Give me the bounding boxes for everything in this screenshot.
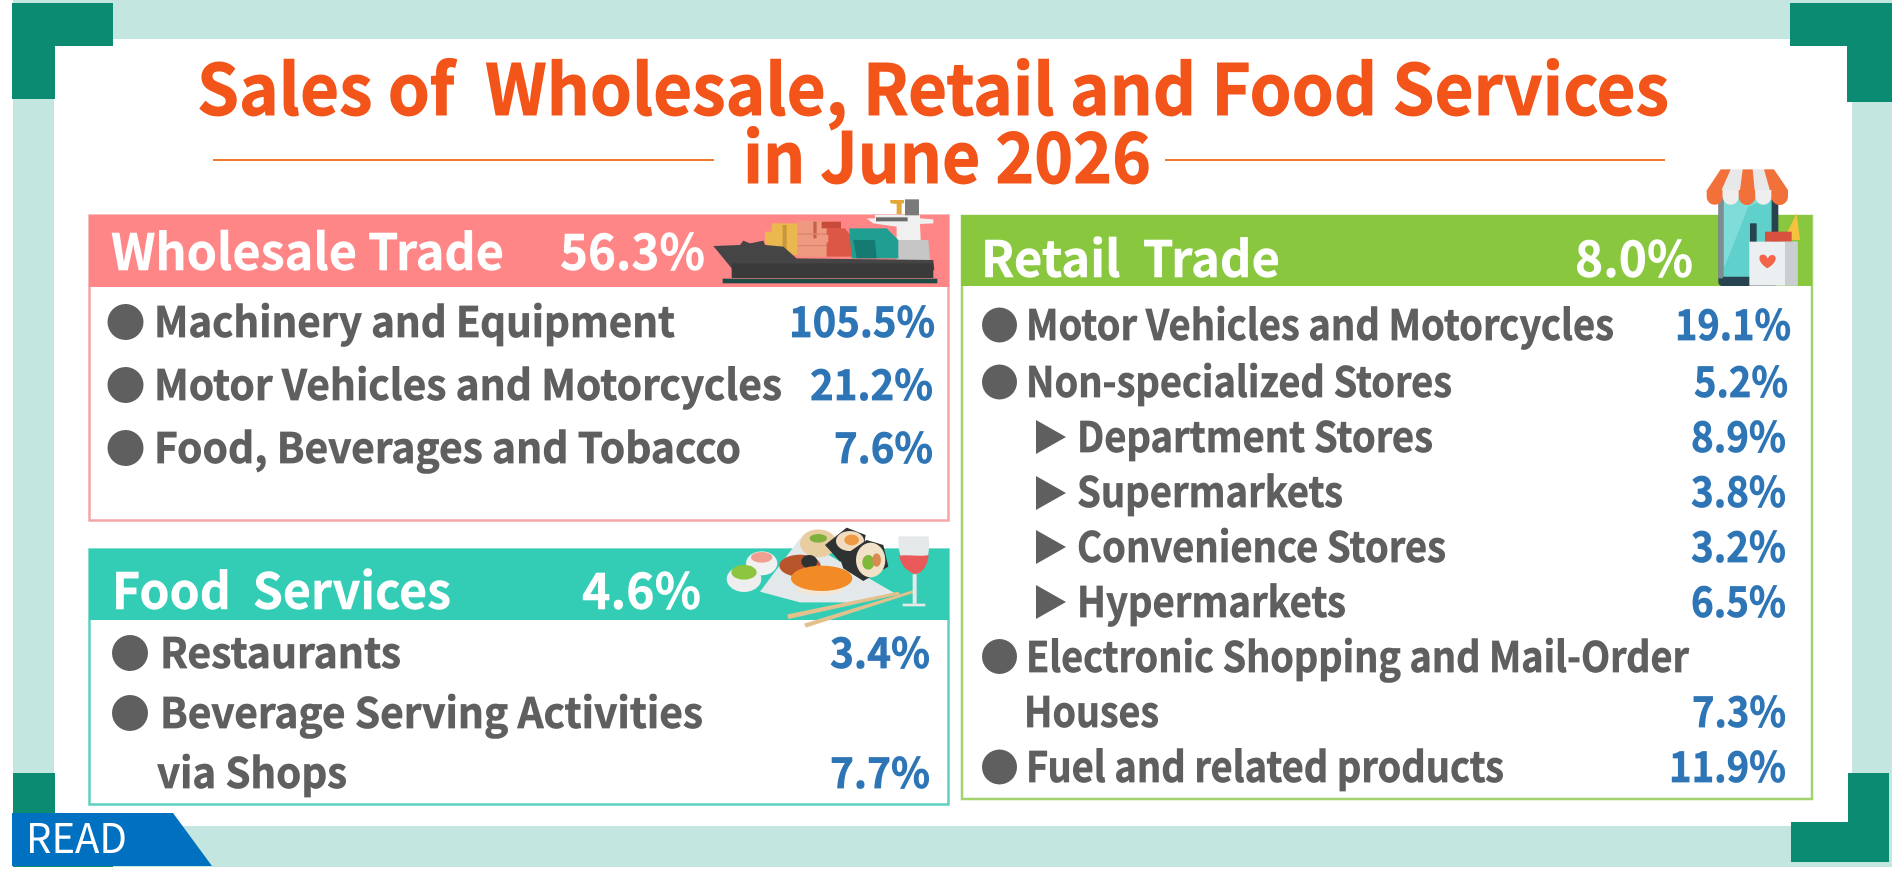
row: motor vehicles and motorcycles: Motor Vehicles and Motorcycles bbox=[154, 352, 782, 413]
panel: wholesale trade: 56.3% bbox=[560, 213, 705, 285]
row: convenience stores: Convenience Stores bbox=[1077, 514, 1446, 575]
row: motor vehicles and motorcycles: 21.2% bbox=[810, 352, 933, 413]
icon: container ship bbox=[713, 199, 937, 283]
panel: food services bbox=[89, 528, 949, 804]
row: electronic shopping and mail-order houses: Houses bbox=[1024, 679, 1159, 740]
row: convenience stores: 3.2% bbox=[1691, 514, 1786, 575]
row: electronic shopping and mail-order houses: Electronic Shopping and Mail-Order bbox=[1026, 624, 1690, 685]
row: restaurants: Restaurants bbox=[160, 620, 401, 681]
row: fuel and related products bbox=[982, 734, 1786, 795]
title: in June 2026 bbox=[743, 103, 1151, 204]
corner: bottom left bbox=[13, 773, 113, 867]
icon: sushi plate and wine bbox=[727, 528, 929, 628]
panel: wholesale trade: Wholesale Trade bbox=[111, 213, 504, 285]
row: department stores: 8.9% bbox=[1691, 404, 1786, 465]
row: supermarkets: Supermarkets bbox=[1077, 459, 1343, 520]
row: fuel and related products: 11.9% bbox=[1669, 734, 1786, 795]
title bbox=[197, 35, 1669, 204]
row: restaurants bbox=[112, 620, 930, 681]
read tag bbox=[12, 805, 212, 866]
corner: top right bbox=[1790, 3, 1892, 102]
panel: food services: 4.6% bbox=[582, 552, 701, 624]
row: non-specialized stores: 5.2% bbox=[1694, 349, 1788, 410]
row: beverage serving activities via shops bbox=[112, 680, 930, 801]
panel: retail trade: Retail Trade bbox=[981, 220, 1280, 292]
row: fuel and related products: Fuel and related products bbox=[1026, 734, 1504, 795]
row: restaurants: 3.4% bbox=[830, 620, 930, 681]
panel: wholesale trade bbox=[89, 199, 949, 520]
icon: phone shop with shopping bag bbox=[1707, 169, 1800, 286]
row: motor vehicles and motorcycles: Motor Vehicles and Motorcycles bbox=[1026, 292, 1614, 353]
row: supermarkets: 3.8% bbox=[1691, 459, 1786, 520]
row: convenience stores bbox=[1036, 514, 1786, 575]
row: food, beverages and tobacco: Food, Beverages and Tobacco bbox=[154, 415, 741, 476]
row: department stores: Department Stores bbox=[1077, 404, 1433, 465]
corner: top left bbox=[12, 3, 113, 99]
row: machinery and equipment: Machinery and Equipment bbox=[154, 289, 675, 350]
panel: food services: Food Services bbox=[112, 552, 451, 624]
row: food, beverages and tobacco: 7.6% bbox=[834, 415, 933, 476]
row: non-specialized stores bbox=[982, 349, 1788, 410]
corner: bottom right bbox=[1791, 773, 1889, 862]
row: electronic shopping and mail-order houses: 7.3% bbox=[1692, 679, 1786, 740]
row: machinery and equipment bbox=[108, 289, 935, 350]
row: hypermarkets: 6.5% bbox=[1691, 569, 1786, 630]
row: supermarkets bbox=[1036, 459, 1786, 520]
row: machinery and equipment: 105.5% bbox=[789, 289, 935, 350]
row: motor vehicles and motorcycles: 19.1% bbox=[1675, 292, 1791, 353]
panel: retail trade: 8.0% bbox=[1575, 220, 1693, 292]
row: non-specialized stores: Non-specialized Stores bbox=[1026, 349, 1452, 410]
row: electronic shopping and mail-order houses bbox=[982, 624, 1786, 740]
panel: retail trade bbox=[961, 169, 1812, 799]
title: Sales of Wholesale, Retail and Food Services bbox=[197, 35, 1669, 136]
row: beverage serving activities via shops: Beverage Serving Activities bbox=[160, 680, 703, 741]
row: beverage serving activities via shops: via Shops bbox=[157, 740, 347, 801]
row: department stores bbox=[1036, 404, 1786, 465]
row: beverage serving activities via shops: 7.7% bbox=[830, 740, 930, 801]
read tag: READ bbox=[26, 805, 127, 865]
row: hypermarkets: Hypermarkets bbox=[1077, 569, 1346, 630]
row: hypermarkets bbox=[1036, 569, 1786, 630]
